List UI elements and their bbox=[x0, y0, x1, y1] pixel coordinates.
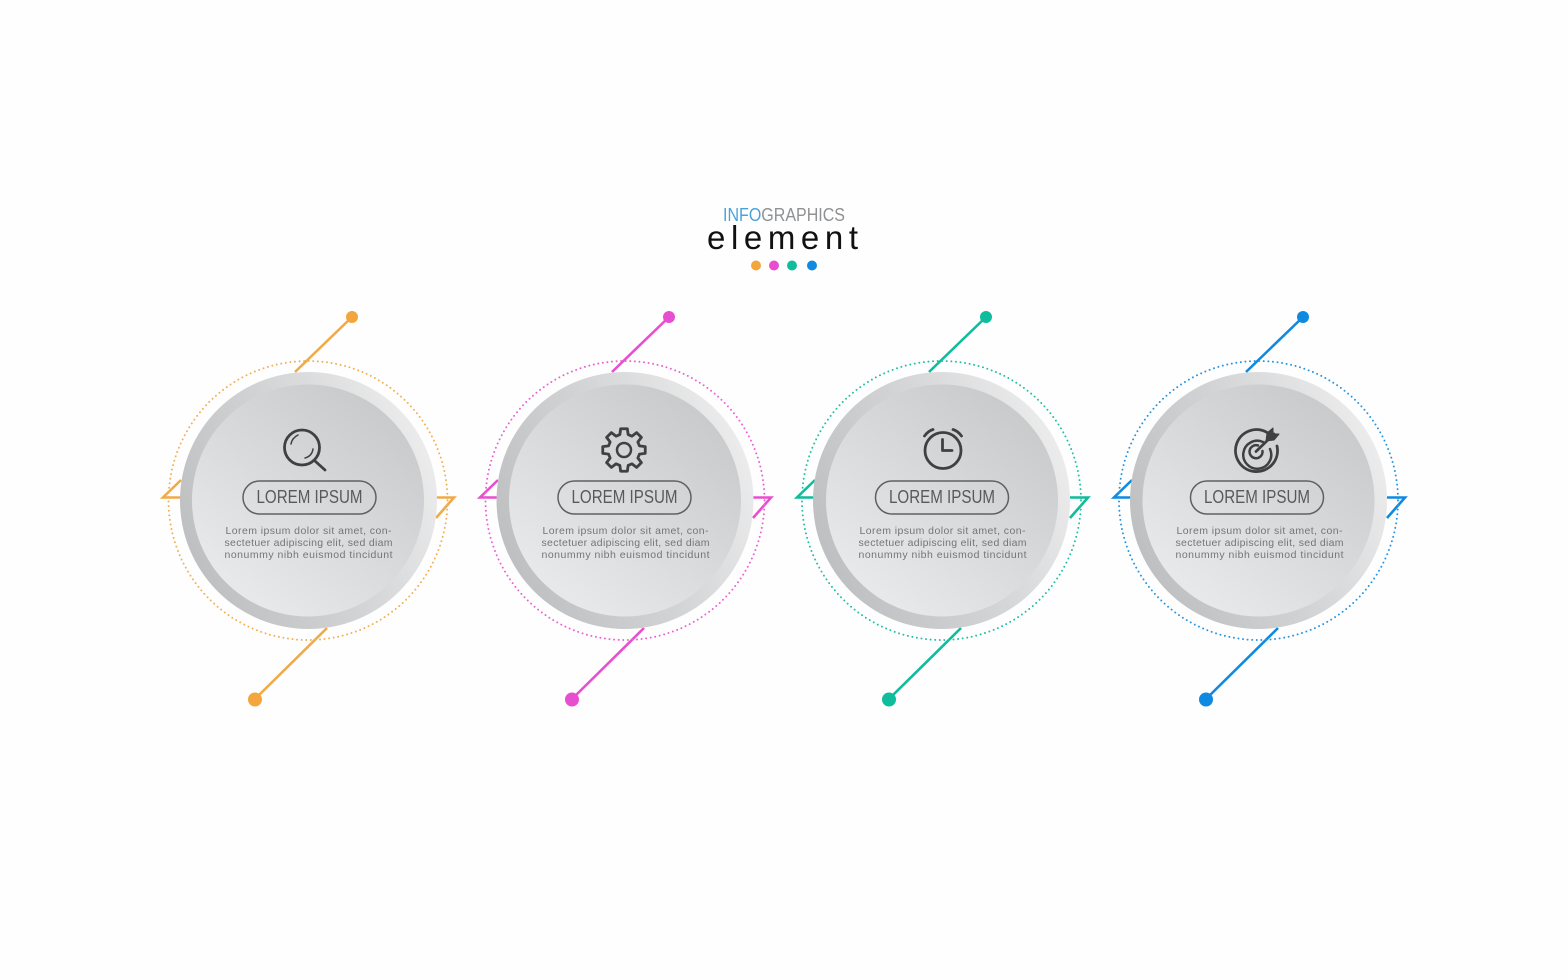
description: Lorem ipsum dolor sit amet, con- bbox=[226, 525, 392, 537]
description: Lorem ipsum dolor sit amet, con- bbox=[542, 525, 709, 537]
label pill: LOREM IPSUM bbox=[572, 486, 678, 507]
grey disc bbox=[1130, 372, 1387, 629]
panel: settings bbox=[480, 311, 771, 706]
label pill: LOREM IPSUM bbox=[889, 486, 995, 507]
icon: magnifier bbox=[284, 430, 325, 470]
description: sectetuer adipiscing elit, sed diam bbox=[858, 537, 1027, 549]
description bbox=[1176, 525, 1344, 561]
dotted ring bbox=[802, 361, 1081, 640]
icon: gear bbox=[603, 429, 645, 471]
panel: target bbox=[1114, 311, 1405, 706]
description bbox=[858, 525, 1027, 561]
line end dots bbox=[248, 311, 358, 706]
description bbox=[542, 525, 710, 561]
description: Lorem ipsum dolor sit amet, con- bbox=[860, 525, 1026, 537]
description: sectetuer adipiscing elit, sed diam bbox=[542, 537, 710, 549]
grey disc bbox=[180, 372, 437, 629]
description: sectetuer adipiscing elit, sed diam bbox=[1176, 537, 1344, 549]
dotted ring bbox=[168, 361, 448, 640]
panel: alarm clock bbox=[797, 311, 1088, 706]
dotted ring bbox=[1119, 361, 1398, 640]
title: element: element bbox=[707, 219, 858, 256]
line end dots bbox=[882, 311, 992, 706]
line end dots bbox=[565, 311, 675, 706]
description: Lorem ipsum dolor sit amet, con- bbox=[1176, 525, 1343, 537]
connector lines bbox=[797, 317, 1088, 699]
label pill bbox=[1190, 481, 1324, 514]
grey disc bbox=[813, 372, 1070, 629]
label pill: LOREM IPSUM bbox=[1204, 486, 1310, 507]
icon: target bbox=[1236, 428, 1279, 472]
line end dots bbox=[1199, 311, 1309, 706]
title: infographics: INFOGRAPHICS bbox=[723, 205, 845, 225]
label pill bbox=[558, 481, 691, 514]
title bbox=[707, 205, 858, 270]
description: nonummy nibh euismod tincidunt bbox=[1176, 549, 1344, 561]
description: nonummy nibh euismod tincidunt bbox=[224, 549, 393, 561]
colour dots bbox=[751, 260, 817, 270]
dotted ring bbox=[486, 361, 764, 640]
description: nonummy nibh euismod tincidunt bbox=[542, 549, 710, 561]
label pill: LOREM IPSUM bbox=[256, 486, 362, 507]
label pill bbox=[876, 481, 1008, 514]
description: sectetuer adipiscing elit, sed diam bbox=[224, 537, 393, 549]
panel: search bbox=[163, 311, 454, 706]
grey disc bbox=[496, 372, 754, 629]
description bbox=[224, 525, 393, 561]
label pill bbox=[243, 481, 376, 514]
connector lines bbox=[1114, 317, 1405, 699]
connector lines bbox=[480, 317, 771, 699]
description: nonummy nibh euismod tincidunt bbox=[858, 549, 1027, 561]
connector lines bbox=[163, 317, 454, 699]
icon: alarm clock bbox=[924, 430, 962, 468]
